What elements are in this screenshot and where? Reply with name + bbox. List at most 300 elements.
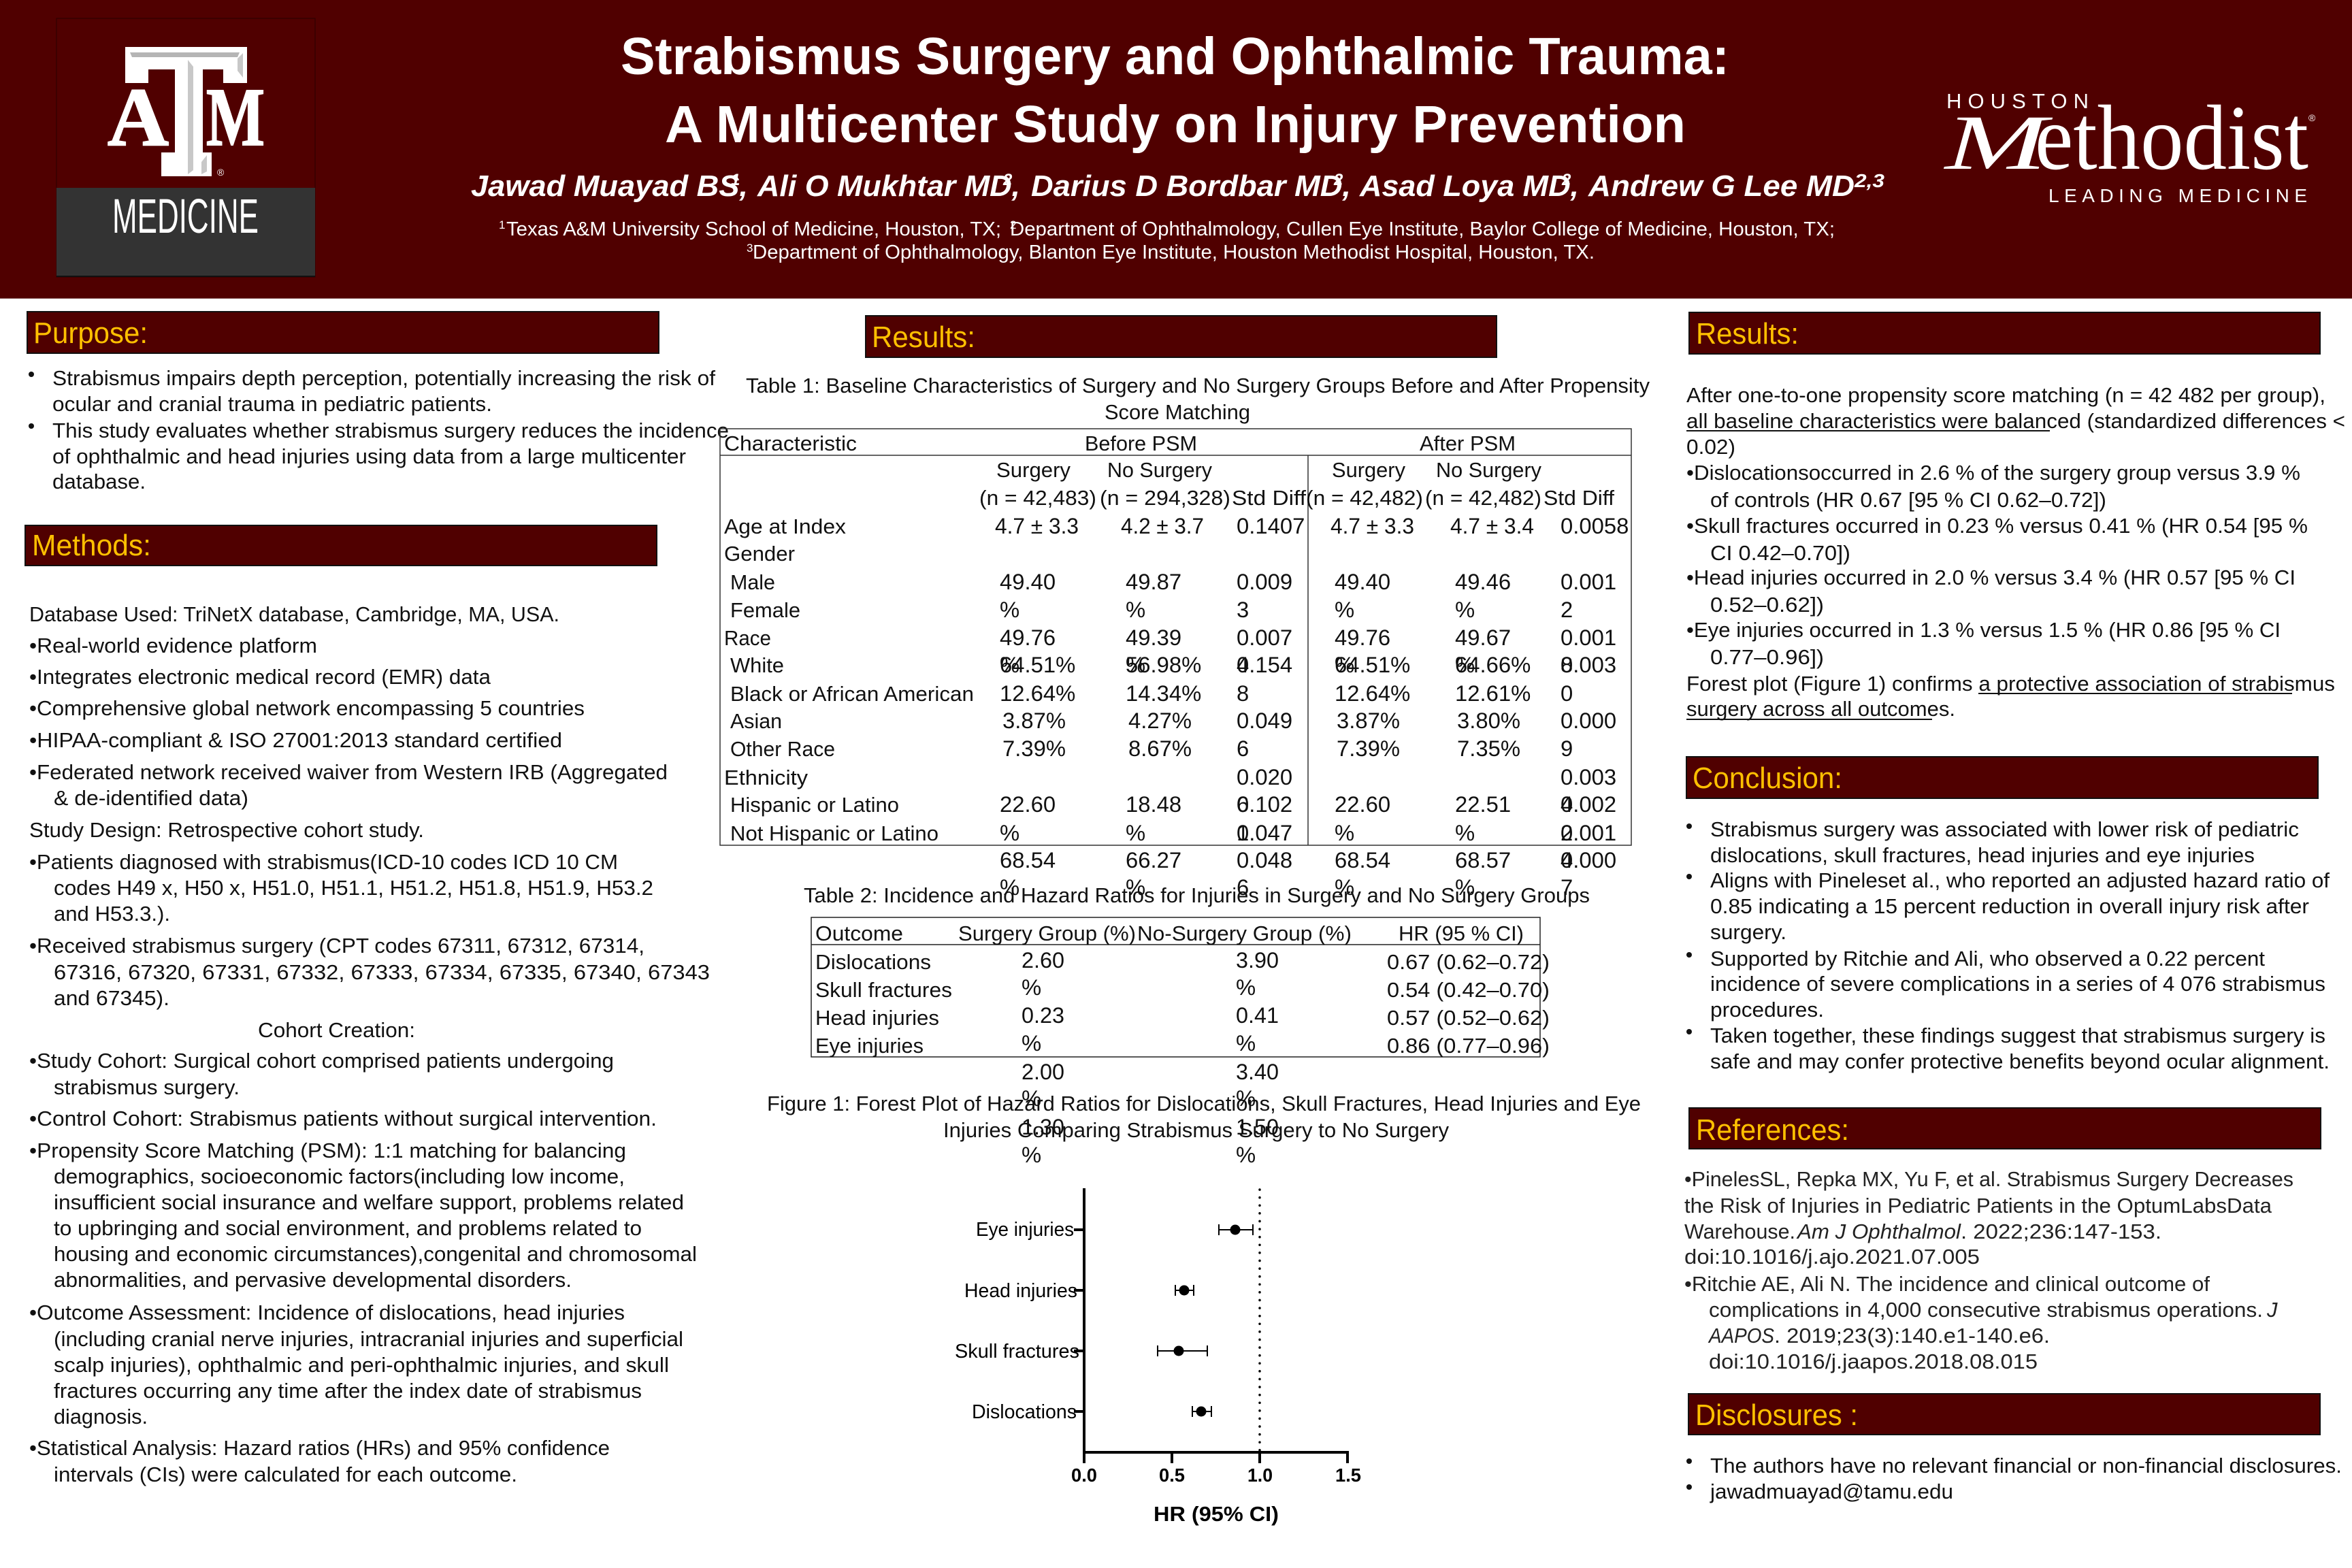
affiliations: 1 bbox=[499, 218, 505, 231]
text block: results summary: 0.77–0.96]) bbox=[1710, 645, 1824, 669]
authors: 2 bbox=[1333, 171, 1343, 189]
text block: results summary: •Head injuries occurred in 2.0 % versus 3.4 % (HR 0.57 [95 % CI bbox=[1686, 566, 2296, 589]
text block: reference list bbox=[1684, 1167, 2293, 1373]
table 1 values: surgery after PSM: 12.64% bbox=[1335, 681, 1410, 706]
text block: conclusion bullets: Strabismus surgery was associated with lower risk of pediatric bbox=[1710, 817, 2299, 841]
logo: Houston Methodist bbox=[1943, 87, 2316, 206]
panel: conclusion bbox=[1686, 757, 2330, 1073]
text block: conclusion bullets: Supported by Ritchie and Ali, who observed a 0.22 percent bbox=[1710, 947, 2265, 970]
table 1 row labels: Female bbox=[730, 598, 800, 622]
table 2 headers: Surgery Group (%) bbox=[958, 921, 1136, 945]
authors: Jawad Muayad BS, bbox=[471, 169, 748, 203]
text block: methods details: •Outcome Assessment: Incidence of dislocations, head injuries bbox=[29, 1301, 625, 1324]
table 2 no-surgery group values: 3.90 bbox=[1236, 947, 1279, 973]
text block: methods details: Cohort Creation: bbox=[258, 1018, 415, 1042]
text block: purpose bullets bbox=[29, 366, 729, 493]
table 1 caption bbox=[746, 374, 1650, 424]
figure 1 caption: Figure 1: Forest Plot of Hazard Ratios for Dislocations, Skull Fractures, Head Injuries and Eye bbox=[767, 1092, 1641, 1115]
logo: Texas A&M Medicine: M bbox=[206, 71, 265, 163]
table 1 column headers: Characteristic bbox=[724, 431, 857, 455]
text block: reference list: the Risk of Injuries in Pediatric Patients in the OptumLabsData bbox=[1684, 1194, 2272, 1218]
title: A Multicenter Study on Injury Prevention bbox=[665, 95, 1686, 154]
text block: results summary: surgery across all outcomes. bbox=[1686, 697, 1955, 721]
header banner bbox=[0, 0, 2352, 299]
table 2 headers bbox=[815, 921, 1524, 945]
table 1 values: surgery before PSM: % bbox=[1000, 597, 1019, 622]
text block: methods details: fractures occurring any time after the index date of strabismus bbox=[54, 1379, 642, 1403]
table 1 values: std diff after PSM: 0 bbox=[1561, 681, 1573, 706]
table 2 no-surgery group values bbox=[1236, 947, 1279, 1167]
text block: results summary bbox=[1686, 383, 2345, 721]
data point: skull fractures bbox=[1158, 1345, 1207, 1356]
table 2: incidence and hazard ratios bbox=[811, 917, 1550, 1167]
x axis tick labels: 1.5 bbox=[1335, 1465, 1361, 1486]
text block: methods details: •Study Cohort: Surgical cohort comprised patients undergoing bbox=[29, 1049, 614, 1073]
table 1 column headers: Std Diff bbox=[1232, 486, 1306, 510]
table 1 values: no surgery before PSM bbox=[1121, 513, 1204, 900]
text block: methods details: abnormalities, and pervasive developmental disorders. bbox=[54, 1268, 572, 1292]
table 1 values: no surgery before PSM: % bbox=[1126, 652, 1145, 677]
affiliations: Texas A&M University School of Medicine, Houston, TX; bbox=[506, 218, 1001, 240]
table 1 values: std diff before PSM: 6 bbox=[1237, 736, 1249, 761]
table 1 values: no surgery after PSM: 64.66% bbox=[1455, 652, 1531, 677]
table 1 values: no surgery before PSM: 4.27% bbox=[1128, 708, 1192, 733]
text block: methods details: housing and economic circumstances),congenital and chromosomal bbox=[54, 1242, 697, 1266]
table 1 values: std diff after PSM: 4 bbox=[1561, 847, 1573, 872]
text block: results summary: of controls (HR 0.67 [95 % CI 0.62–0.72]) bbox=[1710, 488, 2106, 512]
table 2 surgery group values: % bbox=[1022, 975, 1041, 1000]
heading: Purpose: Purpose: bbox=[33, 316, 148, 350]
table 2 no-surgery group values: 1.50 bbox=[1236, 1114, 1279, 1139]
table 1 values: std diff before PSM: 0.1407 bbox=[1237, 513, 1305, 538]
table 1 values: no surgery before PSM: 8.67% bbox=[1128, 736, 1192, 761]
text block: methods details: strabismus surgery. bbox=[54, 1075, 240, 1099]
table 1 values: no surgery after PSM: 7.35% bbox=[1457, 736, 1520, 761]
text block: results summary: 0.02) bbox=[1686, 435, 1735, 459]
logo: Texas A&M Medicine: MEDICINE bbox=[112, 190, 259, 244]
table 1 values: surgery after PSM: 68.54 bbox=[1335, 847, 1390, 872]
table 2 outcomes bbox=[815, 950, 952, 1058]
table 1 values: no surgery after PSM: 4.7 ± 3.4 bbox=[1450, 513, 1534, 538]
text block: disclosure bullets bbox=[1686, 1454, 2342, 1503]
text block: conclusion bullets bbox=[1686, 817, 2330, 1073]
text block: reference list: doi:10.1016/j.ajo.2021.07.005 bbox=[1684, 1245, 1980, 1269]
text block: results summary: •Skull fractures occurred in 0.23 % versus 0.41 % (HR 0.54 [95 % bbox=[1686, 514, 2308, 538]
authors: Asad Loya MD, bbox=[1359, 169, 1579, 203]
authors: 2 bbox=[1561, 171, 1571, 189]
panel: results right bbox=[1686, 312, 2345, 721]
text block: reference list: •Ritchie AE, Ali N. The incidence and clinical outcome of bbox=[1684, 1272, 2210, 1296]
table 1 row labels: White bbox=[730, 653, 784, 677]
table 2 outcomes: Head injuries bbox=[815, 1006, 939, 1030]
axes and ticks bbox=[1074, 1188, 1349, 1463]
table 1 values: std diff after PSM: 0.003 bbox=[1561, 652, 1616, 677]
table 1 values: std diff after PSM: 7 bbox=[1561, 875, 1573, 900]
table 1 values: surgery after PSM: 4.7 ± 3.3 bbox=[1330, 513, 1414, 538]
table 1 row labels: Not Hispanic or Latino bbox=[730, 821, 938, 845]
heading: Results bbox=[1689, 312, 2320, 354]
text block: methods details: •Statistical Analysis: Hazard ratios (HRs) and 95% confidence bbox=[29, 1436, 610, 1460]
text block: methods details: •Received strabismus surgery (CPT codes 67311, 67312, 67314, bbox=[29, 934, 644, 958]
table 1 values: std diff after PSM: 0.000 bbox=[1561, 847, 1616, 872]
heading: Results bbox=[866, 316, 1497, 357]
table 1 values: std diff before PSM: 0.102 bbox=[1237, 791, 1292, 817]
authors bbox=[471, 169, 1884, 203]
table 1 values: std diff after PSM: 0.002 bbox=[1561, 791, 1616, 817]
table 1 values: std diff before PSM: 0.047 bbox=[1237, 820, 1292, 845]
text block: results summary: After one-to-one propensity score matching (n = 42 482 per group), bbox=[1686, 383, 2325, 407]
table 2 hazard ratios: 0.57 (0.52–0.62) bbox=[1387, 1006, 1550, 1030]
text block: reference list: Am J Ophthalmol bbox=[1796, 1220, 1961, 1243]
text block: methods details: •Control Cohort: Strabismus patients without surgical intervention. bbox=[29, 1107, 657, 1130]
table 1 values: surgery before PSM: 49.40 bbox=[1000, 569, 1056, 594]
heading: References bbox=[1689, 1108, 2321, 1149]
table 1 values: std diff after PSM: 2 bbox=[1561, 597, 1573, 622]
text block: reference list: complications in 4,000 consecutive strabismus operations. bbox=[1709, 1298, 2263, 1322]
logo: Houston Methodist: ® bbox=[2308, 112, 2316, 123]
heading: Conclusion: Conclusion: bbox=[1693, 762, 1842, 795]
table 1 values: std diff before PSM: 8 bbox=[1237, 681, 1249, 706]
table 1 values: no surgery after PSM: 68.57 bbox=[1455, 847, 1511, 872]
table 1 values: no surgery before PSM: 4.2 ± 3.7 bbox=[1121, 513, 1204, 538]
table 1 values: no surgery before PSM: 49.39 bbox=[1126, 625, 1181, 650]
table 1 column headers: (n = 42,483) bbox=[979, 486, 1096, 510]
authors: 2 bbox=[1002, 171, 1013, 189]
table 1 column headers: No Surgery bbox=[1436, 458, 1541, 482]
affiliations: Department of Ophthalmology, Cullen Eye Institute, Baylor College of Medicine, Houston, TX; bbox=[1010, 218, 1835, 240]
table 1 values: surgery before PSM: 22.60 bbox=[1000, 791, 1056, 817]
table 2 outcomes: Eye injuries bbox=[815, 1034, 924, 1058]
table 1 values: std diff after PSM: 2 bbox=[1561, 820, 1573, 845]
table 1 values: std diff before PSM: 1 bbox=[1237, 820, 1249, 845]
table 1 column headers: (n = 42,482) bbox=[1425, 486, 1541, 510]
heading: Conclusion bbox=[1686, 757, 2318, 798]
logo: Houston Methodist: HOUSTON bbox=[1946, 89, 2089, 113]
table 1 row labels: Asian bbox=[730, 709, 782, 733]
table 1 values: no surgery before PSM: % bbox=[1126, 597, 1145, 622]
table 1 values: no surgery after PSM: 49.46 bbox=[1455, 569, 1511, 594]
logo: Houston Methodist: M bbox=[1943, 99, 2054, 186]
table 1 values: no surgery after PSM: % bbox=[1455, 652, 1475, 677]
text block: reference list: doi:10.1016/j.jaapos.2018.08.015 bbox=[1709, 1350, 2038, 1373]
table 1 column headers: Surgery bbox=[996, 458, 1071, 482]
table 1 values: surgery before PSM: 3.87% bbox=[1002, 708, 1066, 733]
table 1 values: surgery before PSM: % bbox=[1000, 820, 1019, 845]
table 1 values: surgery after PSM: % bbox=[1335, 820, 1354, 845]
table 2 hazard ratios bbox=[1387, 950, 1550, 1058]
table 1 row labels: Other Race bbox=[730, 737, 835, 761]
table 1 values: no surgery after PSM bbox=[1450, 513, 1534, 900]
logo: Texas A&M Medicine bbox=[56, 18, 315, 277]
table 1 values: surgery after PSM bbox=[1330, 513, 1414, 900]
logo: Houston Methodist: ethodist bbox=[2035, 87, 2308, 189]
table 1 values: no surgery after PSM: % bbox=[1455, 875, 1475, 900]
table 1 values: no surgery after PSM: 22.51 bbox=[1455, 791, 1511, 817]
table 1 values: no surgery before PSM: 56.98% bbox=[1126, 652, 1201, 677]
title bbox=[621, 27, 1729, 154]
text block: reference list: . 2022;236:147-153. bbox=[1961, 1220, 2161, 1243]
table 1 values: surgery after PSM: 49.40 bbox=[1335, 569, 1390, 594]
text block: methods details: and 67345). bbox=[54, 986, 169, 1010]
x axis title: HR (95% CI) bbox=[1154, 1502, 1279, 1526]
table 1 values: surgery after PSM: 49.76 bbox=[1335, 625, 1390, 650]
table 1 values: surgery before PSM: 64.51% bbox=[1000, 652, 1075, 677]
table 2 surgery group values: 2.60 bbox=[1022, 947, 1064, 973]
table 1 values: std diff before PSM: 0.020 bbox=[1237, 764, 1292, 789]
table 1 column headers bbox=[724, 431, 1614, 510]
text block: conclusion bullets: 0.85 indicating a 15 percent reduction in overall injury risk after bbox=[1710, 894, 2309, 918]
table 2 frame bbox=[811, 917, 1540, 1057]
text block: conclusion bullets: procedures. bbox=[1710, 998, 1824, 1022]
affiliations bbox=[499, 218, 1835, 263]
table 1 values: surgery after PSM: % bbox=[1335, 597, 1354, 622]
figure 1 caption: Injuries Comparing Strabismus Surgery to No Surgery bbox=[943, 1118, 1449, 1142]
table 1 values: std diff after PSM: 0.003 bbox=[1561, 764, 1616, 789]
heading: Purpose bbox=[27, 312, 659, 353]
text block: methods details: •HIPAA-compliant & ISO 27001:2013 standard certified bbox=[29, 728, 562, 752]
text block: disclosure bullets: The authors have no relevant financial or non-financial disclosures. bbox=[1710, 1454, 2342, 1477]
table 2 no-surgery group values: % bbox=[1236, 1142, 1256, 1167]
table 1 row labels: Black or African American bbox=[730, 682, 974, 706]
text block: results summary: all baseline characteristics were balanced (standardized differences < bbox=[1686, 409, 2345, 433]
x axis tick labels: 0.0 bbox=[1071, 1465, 1097, 1486]
table 1 values: std diff before PSM: 0.154 bbox=[1237, 652, 1292, 677]
table 1: baseline characteristics bbox=[720, 429, 1631, 900]
text block: methods details: •Patients diagnosed with strabismus(ICD-10 codes ICD 10 CM bbox=[29, 850, 618, 874]
x axis tick labels: 0.5 bbox=[1159, 1465, 1185, 1486]
text block: methods details: •Integrates electronic medical record (EMR) data bbox=[29, 665, 491, 689]
table 1 column headers: After PSM bbox=[1420, 431, 1516, 455]
text block: conclusion bullets: dislocations, skull fractures, head injuries and eye injuries bbox=[1710, 843, 2255, 867]
table 1 row labels: Gender bbox=[724, 542, 795, 566]
x axis tick labels bbox=[1071, 1465, 1361, 1486]
figure 1 caption bbox=[767, 1092, 1641, 1142]
table 2 surgery group values: % bbox=[1022, 1085, 1041, 1111]
table 1 row labels bbox=[724, 514, 974, 845]
text block: results summary: CI 0.42–0.70]) bbox=[1710, 541, 1850, 565]
y axis labels: Eye injuries bbox=[976, 1219, 1074, 1241]
affiliations: 2 bbox=[1010, 218, 1016, 231]
table 2 surgery group values: 1.30 bbox=[1022, 1114, 1064, 1139]
text block: methods details: Study Design: Retrospective cohort study. bbox=[29, 818, 424, 842]
table 1 values: surgery before PSM: 68.54 bbox=[1000, 847, 1056, 872]
table 1 values: std diff before PSM: 3 bbox=[1237, 597, 1249, 622]
table 1 values: no surgery after PSM: 49.67 bbox=[1455, 625, 1511, 650]
text block: conclusion bullets: safe and may confer protective benefits beyond ocular alignment. bbox=[1710, 1049, 2330, 1073]
text block: reference list: J bbox=[2266, 1298, 2278, 1322]
heading: References: References: bbox=[1696, 1113, 1849, 1147]
authors: Ali O Mukhtar MD, bbox=[757, 169, 1020, 203]
table 1 column headers: Std Diff bbox=[1544, 486, 1614, 510]
table 2 no-surgery group values: 3.40 bbox=[1236, 1059, 1279, 1084]
table 1 values: no surgery before PSM: 18.48 bbox=[1126, 791, 1181, 817]
table 2 headers: Outcome bbox=[815, 921, 903, 945]
text block: purpose bullets: Strabismus impairs depth perception, potentially increasing the risk of bbox=[52, 366, 715, 390]
table 2 no-surgery group values: % bbox=[1236, 1030, 1256, 1056]
table 1 values: no surgery before PSM: 66.27 bbox=[1126, 847, 1181, 872]
text block: methods details: insufficient social insurance and welfare support, problems related bbox=[54, 1190, 684, 1214]
authors: 1 bbox=[731, 171, 740, 189]
title: Strabismus Surgery and Ophthalmic Trauma: bbox=[621, 27, 1729, 86]
y axis labels: Skull fractures bbox=[955, 1341, 1079, 1362]
text block: methods details: codes H49 x, H50 x, H51.0, H51.1, H51.2, H51.8, H51.9, H53.2 bbox=[54, 876, 653, 900]
heading: Methods: Methods: bbox=[32, 529, 151, 562]
text block: methods details: to upbringing and social environment, and problems related to bbox=[54, 1216, 642, 1240]
table 1 values: surgery after PSM: 22.60 bbox=[1335, 791, 1390, 817]
table 1 values: no surgery before PSM: % bbox=[1126, 875, 1145, 900]
table 1 column headers: (n = 294,328) bbox=[1100, 486, 1230, 510]
text block: reference list: . 2019;23(3):140.e1-140.e6. bbox=[1774, 1324, 2050, 1348]
table 1 values: surgery before PSM: 4.7 ± 3.3 bbox=[995, 513, 1079, 538]
panel: references bbox=[1684, 1108, 2321, 1373]
text block: results summary: •Eye injuries occurred in 1.3 % versus 1.5 % (HR 0.86 [95 % CI bbox=[1686, 618, 2281, 642]
text block: results summary: 0.52–0.62]) bbox=[1710, 593, 1824, 617]
text block: methods details: •Federated network received waiver from Western IRB (Aggregated bbox=[29, 760, 668, 784]
table 1 values: no surgery after PSM: % bbox=[1455, 597, 1475, 622]
table 2 hazard ratios: 0.86 (0.77–0.96) bbox=[1387, 1034, 1550, 1058]
heading: Results: Results: bbox=[872, 321, 975, 354]
table 1 values: std diff after PSM bbox=[1561, 513, 1629, 900]
table 1 row labels: Ethnicity bbox=[724, 766, 808, 789]
text block: results summary: •Dislocationsoccurred in 2.6 % of the surgery group versus 3.9 % bbox=[1686, 461, 2300, 485]
table 1 values: no surgery before PSM: 14.34% bbox=[1126, 681, 1201, 706]
table 2 hazard ratios: 0.67 (0.62–0.72) bbox=[1387, 950, 1550, 974]
table 1 values: std diff before PSM: 6 bbox=[1237, 791, 1249, 817]
text block: methods details: •Real-world evidence platform bbox=[29, 634, 317, 657]
authors: 2,3 bbox=[1854, 170, 1884, 191]
text block: methods details: scalp injuries), ophthalmic and peri-ophthalmic injuries, and skull bbox=[54, 1353, 669, 1377]
y axis labels bbox=[955, 1219, 1079, 1423]
authors: Andrew G Lee MD bbox=[1588, 169, 1855, 203]
heading: Disclosures: Disclosures : bbox=[1695, 1399, 1858, 1432]
table 1 values: no surgery after PSM: 12.61% bbox=[1455, 681, 1531, 706]
table 1 values: surgery after PSM: % bbox=[1335, 875, 1354, 900]
table 1 values: surgery before PSM: % bbox=[1000, 875, 1019, 900]
text block: conclusion bullets: surgery. bbox=[1710, 920, 1786, 944]
text block: methods details: •Comprehensive global network encompassing 5 countries bbox=[29, 696, 585, 720]
data point: eye injuries bbox=[1219, 1224, 1253, 1235]
text block: conclusion bullets: Taken together, these findings suggest that strabismus surgery is bbox=[1710, 1024, 2325, 1047]
heading: Disclosures bbox=[1688, 1394, 2320, 1435]
table 2 surgery group values bbox=[1022, 947, 1064, 1167]
text block: conclusion bullets: Aligns with Pineleset al., who reported an adjusted hazard ratio of bbox=[1710, 868, 2330, 892]
table 1 values: surgery after PSM: 7.39% bbox=[1337, 736, 1400, 761]
table 1 values: std diff after PSM: 9 bbox=[1561, 736, 1573, 761]
text block: results summary: Forest plot (Figure 1) confirms a protective association of strabismus bbox=[1686, 672, 2335, 696]
text block: purpose bullets: database. bbox=[52, 470, 146, 493]
x axis tick labels: 1.0 bbox=[1247, 1465, 1273, 1486]
text block: reference list: Warehouse. bbox=[1684, 1220, 1795, 1243]
heading: Results: Results: bbox=[1696, 317, 1799, 350]
table 1 column headers: No Surgery bbox=[1107, 458, 1212, 482]
table 1 values: std diff after PSM: 0.000 bbox=[1561, 708, 1616, 733]
panel: methods bbox=[25, 525, 710, 1486]
table 1 row labels: Age at Index bbox=[724, 514, 847, 538]
table 1 values: std diff after PSM: 8 bbox=[1561, 652, 1573, 677]
text block: disclosure bullets: jawadmuayad@tamu.edu bbox=[1710, 1480, 1953, 1503]
table 1 row labels: Race bbox=[724, 626, 771, 650]
text block: purpose bullets: of ophthalmic and head injuries using data from a large multicenter bbox=[52, 444, 686, 468]
table 2 surgery group values: % bbox=[1022, 1030, 1041, 1056]
table 1 values: std diff before PSM bbox=[1237, 513, 1305, 900]
table 1 row labels: Hispanic or Latino bbox=[730, 793, 899, 817]
table 2 surgery group values: 0.23 bbox=[1022, 1002, 1064, 1028]
table 1 values: std diff after PSM: 0.001 bbox=[1561, 569, 1616, 594]
table 1 column headers: Surgery bbox=[1332, 458, 1405, 482]
table 1 values: std diff before PSM: 0.009 bbox=[1237, 569, 1292, 594]
text block: conclusion bullets: incidence of severe complications in a series of 4 076 strabismus bbox=[1710, 972, 2325, 996]
logo: Houston Methodist: LEADING MEDICINE bbox=[2048, 185, 2307, 206]
table 1 values: surgery after PSM: % bbox=[1335, 652, 1354, 677]
table 1 values: surgery after PSM: 64.51% bbox=[1335, 652, 1410, 677]
y axis labels: Head injuries bbox=[964, 1280, 1077, 1302]
table 1 values: std diff before PSM: 4 bbox=[1237, 652, 1249, 677]
table 2 surgery group values: 2.00 bbox=[1022, 1059, 1064, 1084]
table 2 headers: No-Surgery Group (%) bbox=[1137, 921, 1352, 945]
table 1 values: no surgery before PSM: % bbox=[1126, 820, 1145, 845]
table 1 column headers: Before PSM bbox=[1085, 431, 1197, 455]
table 2 headers: HR (95 % CI) bbox=[1399, 921, 1524, 945]
panel: results centre bbox=[720, 316, 1650, 1526]
table 1 values: std diff after PSM: 0.001 bbox=[1561, 625, 1616, 650]
text block: purpose bullets: This study evaluates whether strabismus surgery reduces the incidence bbox=[52, 419, 729, 442]
logo: Texas A&M Medicine: A bbox=[108, 71, 169, 163]
data point: dislocations bbox=[1192, 1406, 1211, 1417]
text block: methods details bbox=[29, 602, 710, 1486]
text block: methods details: and H53.3.). bbox=[54, 902, 170, 926]
table 2 outcomes: Skull fractures bbox=[815, 978, 952, 1002]
table 1 caption: Score Matching bbox=[1105, 400, 1250, 424]
table 1 values: no surgery after PSM: 3.80% bbox=[1457, 708, 1520, 733]
table 2 no-surgery group values: % bbox=[1236, 1085, 1256, 1111]
table 1 caption: Table 1: Baseline Characteristics of Surgery and No Surgery Groups Before and After Propensity bbox=[746, 374, 1650, 397]
table 1 row labels: Male bbox=[730, 570, 775, 594]
table 1 values: surgery before PSM: 12.64% bbox=[1000, 681, 1075, 706]
text block: reference list: •PinelesSL, Repka MX, Yu F, et al. Strabismus Surgery Decreases bbox=[1684, 1167, 2293, 1191]
text block: methods details: (including cranial nerve injuries, intracranial injuries and superficial bbox=[54, 1327, 683, 1351]
text block: methods details: demographics, socioeconomic factors(including low income, bbox=[54, 1164, 625, 1188]
table 1 values: no surgery before PSM: 49.87 bbox=[1126, 569, 1181, 594]
text block: purpose bullets: ocular and cranial trauma in pediatric patients. bbox=[52, 392, 492, 416]
text block: methods details: 67316, 67320, 67331, 67332, 67333, 67334, 67335, 67340, 67343 bbox=[54, 960, 710, 984]
panel: disclosures bbox=[1686, 1394, 2342, 1503]
y axis labels: Dislocations bbox=[972, 1401, 1077, 1423]
table 1 values: std diff before PSM: 0.049 bbox=[1237, 708, 1292, 733]
table 2 hazard ratios: 0.54 (0.42–0.70) bbox=[1387, 978, 1550, 1002]
table 2 surgery group values: % bbox=[1022, 1142, 1041, 1167]
text block: methods details: diagnosis. bbox=[54, 1405, 148, 1428]
table 1 column headers: (n = 42,482) bbox=[1306, 486, 1423, 510]
panel: purpose bbox=[27, 312, 729, 493]
table 1 values: std diff after PSM: 4 bbox=[1561, 791, 1573, 817]
table 1 values: surgery after PSM: 3.87% bbox=[1337, 708, 1400, 733]
text block: methods details: intervals (CIs) were calculated for each outcome. bbox=[54, 1463, 517, 1486]
text block: methods details: Database Used: TriNetX database, Cambridge, MA, USA. bbox=[29, 602, 559, 626]
table 2 outcomes: Dislocations bbox=[815, 950, 931, 974]
table 2 no-surgery group values: % bbox=[1236, 975, 1256, 1000]
table 1 values: std diff before PSM: 6 bbox=[1237, 875, 1249, 900]
data point: head injuries bbox=[1175, 1285, 1194, 1296]
affiliations: Department of Ophthalmology, Blanton Eye Institute, Houston Methodist Hospital, Houston, TX. bbox=[753, 242, 1595, 263]
table 1 values: surgery before PSM: 7.39% bbox=[1002, 736, 1066, 761]
table 1 values: std diff before PSM: 0.048 bbox=[1237, 847, 1292, 872]
table 2 no-surgery group values: 0.41 bbox=[1236, 1002, 1279, 1028]
table 1 values: surgery before PSM bbox=[995, 513, 1079, 900]
chart: forest plot of hazard ratios bbox=[955, 1188, 1361, 1526]
affiliations: 3 bbox=[747, 242, 753, 255]
table 1 values: no surgery after PSM: % bbox=[1455, 820, 1475, 845]
text block: methods details: & de-identified data) bbox=[54, 786, 248, 810]
